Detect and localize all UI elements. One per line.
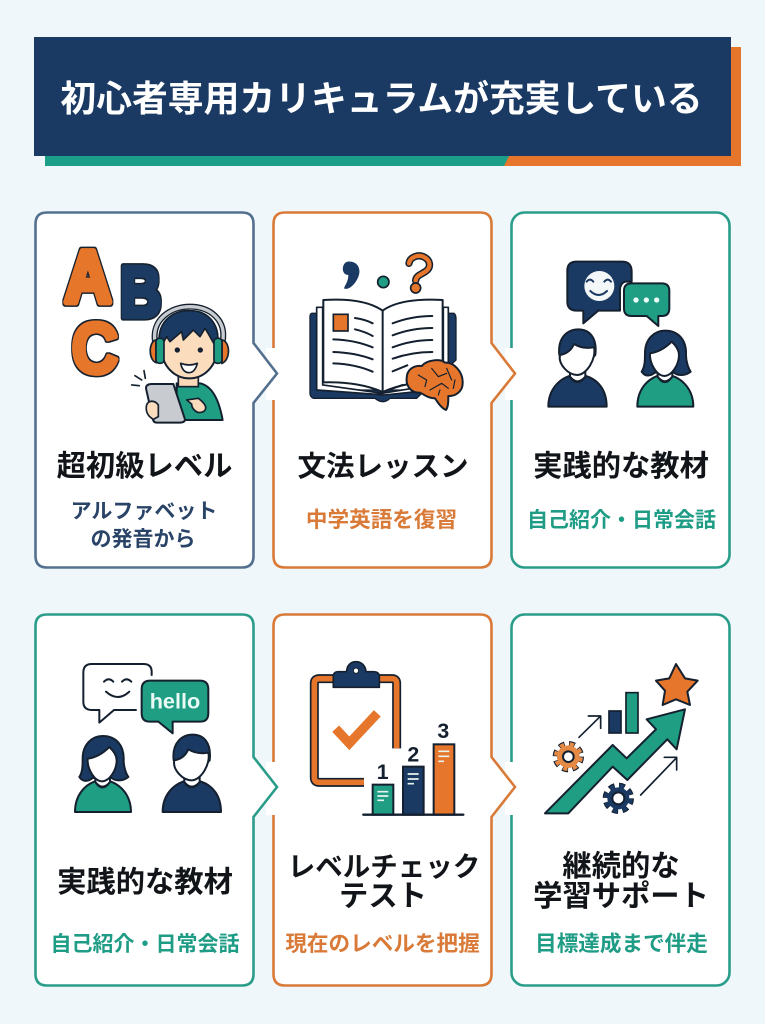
heading: 継続的な <box>562 850 680 883</box>
icon: two people talking <box>548 262 693 407</box>
icon: clipboard and bar chart <box>314 662 463 815</box>
subtext: 自己紹介・日常会話 <box>527 509 716 532</box>
subtext: 中学英語を復習 <box>306 507 457 532</box>
icon: clipboard and bar chart: 3 <box>437 719 449 743</box>
icon: growth arrow, gears and star <box>545 664 698 813</box>
subtext: 現在のレベルを把握 <box>285 931 480 956</box>
panel: continued learning support: 学習サポート <box>533 880 709 913</box>
icon: clipboard and bar chart: 2 <box>407 742 419 766</box>
heading: 文法レッスン <box>297 451 469 483</box>
subtext: 目標達成まで伴走 <box>535 931 708 956</box>
panel: practical materials top <box>505 212 730 568</box>
heading: レベルチェック <box>288 851 480 882</box>
panel: practical materials bottom <box>36 614 277 986</box>
icon: ABC letters and child with headphones: B <box>120 252 161 332</box>
panel: continued learning support <box>505 614 730 986</box>
icon: two people saying hello <box>75 664 221 812</box>
panel: level check test: テスト <box>339 880 427 913</box>
icon: two people saying hello: hello <box>150 689 200 714</box>
heading: 実践的な教材 <box>533 450 709 483</box>
panel: beginner level: の発音から <box>90 528 196 551</box>
heading: 実践的な教材 <box>57 866 233 899</box>
title: 初心者専用カリキュラムが充実している <box>60 79 703 119</box>
heading: 超初級レベル <box>57 450 232 483</box>
icon: ABC letters and child with headphones: A <box>65 235 111 318</box>
icon: ABC letters and child with headphones: C <box>72 309 118 389</box>
subtext: アルファベット <box>71 500 217 523</box>
subtext: 自己紹介・日常会話 <box>50 933 240 956</box>
icon: ABC letters and child with headphones <box>65 235 228 423</box>
panel: beginner level <box>36 212 277 568</box>
panel: grammar lesson <box>266 212 515 568</box>
header banner <box>34 37 741 166</box>
icon: open book with brain <box>310 256 463 410</box>
panel: level check test <box>266 614 515 986</box>
icon: clipboard and bar chart: 1 <box>377 760 389 784</box>
